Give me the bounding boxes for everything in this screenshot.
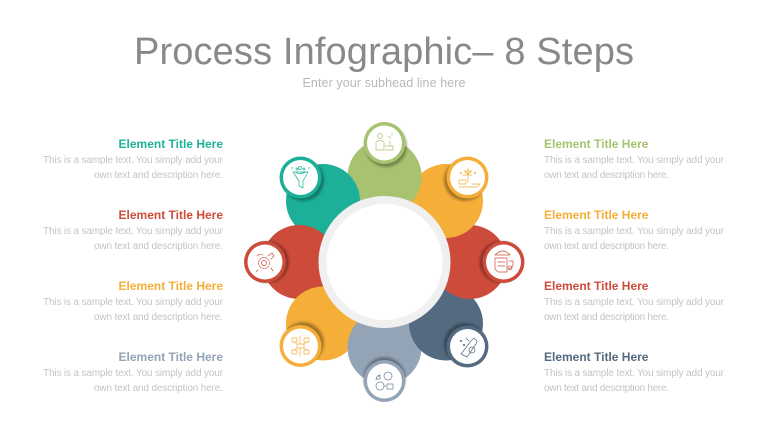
right text block 4: own text and description here. — [544, 383, 669, 394]
icon: gears — [256, 253, 274, 272]
icon: server lock — [495, 251, 513, 272]
icon: funnel — [292, 166, 309, 188]
badge: green — [364, 122, 407, 167]
left text block 1: Element Title Here — [119, 137, 223, 151]
left text block 3: Element Title Here — [119, 279, 223, 293]
left text block 3: own text and description here. — [94, 312, 223, 323]
left text block 3 — [43, 279, 224, 323]
left text block 2 — [43, 208, 224, 252]
left text block 4: Element Title Here — [119, 350, 223, 364]
badge: orange top right — [444, 156, 488, 201]
left text block 1: This is a sample text. You simply add your — [43, 155, 224, 166]
right text block 1: Element Title Here — [544, 137, 649, 151]
right text block 4: This is a sample text. You simply add your — [544, 368, 725, 379]
right text block 1 — [544, 137, 725, 181]
right text block 4 — [544, 350, 725, 394]
badge: orange bottom left — [280, 322, 324, 367]
left text block 4: own text and description here. — [94, 383, 223, 394]
right text block 4: Element Title Here — [544, 350, 649, 364]
badge: navy — [444, 323, 488, 368]
right text block 2: own text and description here. — [544, 241, 669, 252]
badge: grey-blue — [364, 357, 406, 402]
left text block 1: own text and description here. — [94, 170, 223, 181]
right text block 3: This is a sample text. You simply add your — [544, 297, 725, 308]
right text block 2: This is a sample text. You simply add your — [544, 226, 725, 237]
badge: red left — [244, 241, 289, 283]
petal ring — [262, 140, 507, 384]
badge: teal — [280, 156, 324, 201]
left text block 4 — [43, 350, 224, 394]
left text block 2: Element Title Here — [119, 208, 223, 222]
badge: red right — [480, 241, 524, 283]
icon: people — [376, 133, 393, 150]
right text block 1: own text and description here. — [544, 170, 669, 181]
subhead: Enter your subhead line here — [302, 76, 466, 90]
icon: tools — [460, 338, 477, 357]
right text block 3: Element Title Here — [544, 279, 649, 293]
left text block 2: This is a sample text. You simply add your — [43, 226, 224, 237]
left text block 4: This is a sample text. You simply add your — [43, 368, 224, 379]
right text block 2 — [544, 208, 725, 252]
right text block 3 — [544, 279, 725, 323]
title: Process Infographic– 8 Steps — [134, 31, 634, 73]
icon: network — [292, 336, 309, 356]
icon: growth plant — [459, 168, 480, 187]
icon: globe people — [376, 372, 393, 390]
right text block 1: This is a sample text. You simply add your — [544, 155, 725, 166]
left text block 3: This is a sample text. You simply add your — [43, 297, 224, 308]
right text block 3: own text and description here. — [544, 312, 669, 323]
left text block 1 — [43, 137, 224, 181]
left text block 2: own text and description here. — [94, 241, 223, 252]
center circle — [318, 196, 450, 328]
right text block 2: Element Title Here — [544, 208, 649, 222]
